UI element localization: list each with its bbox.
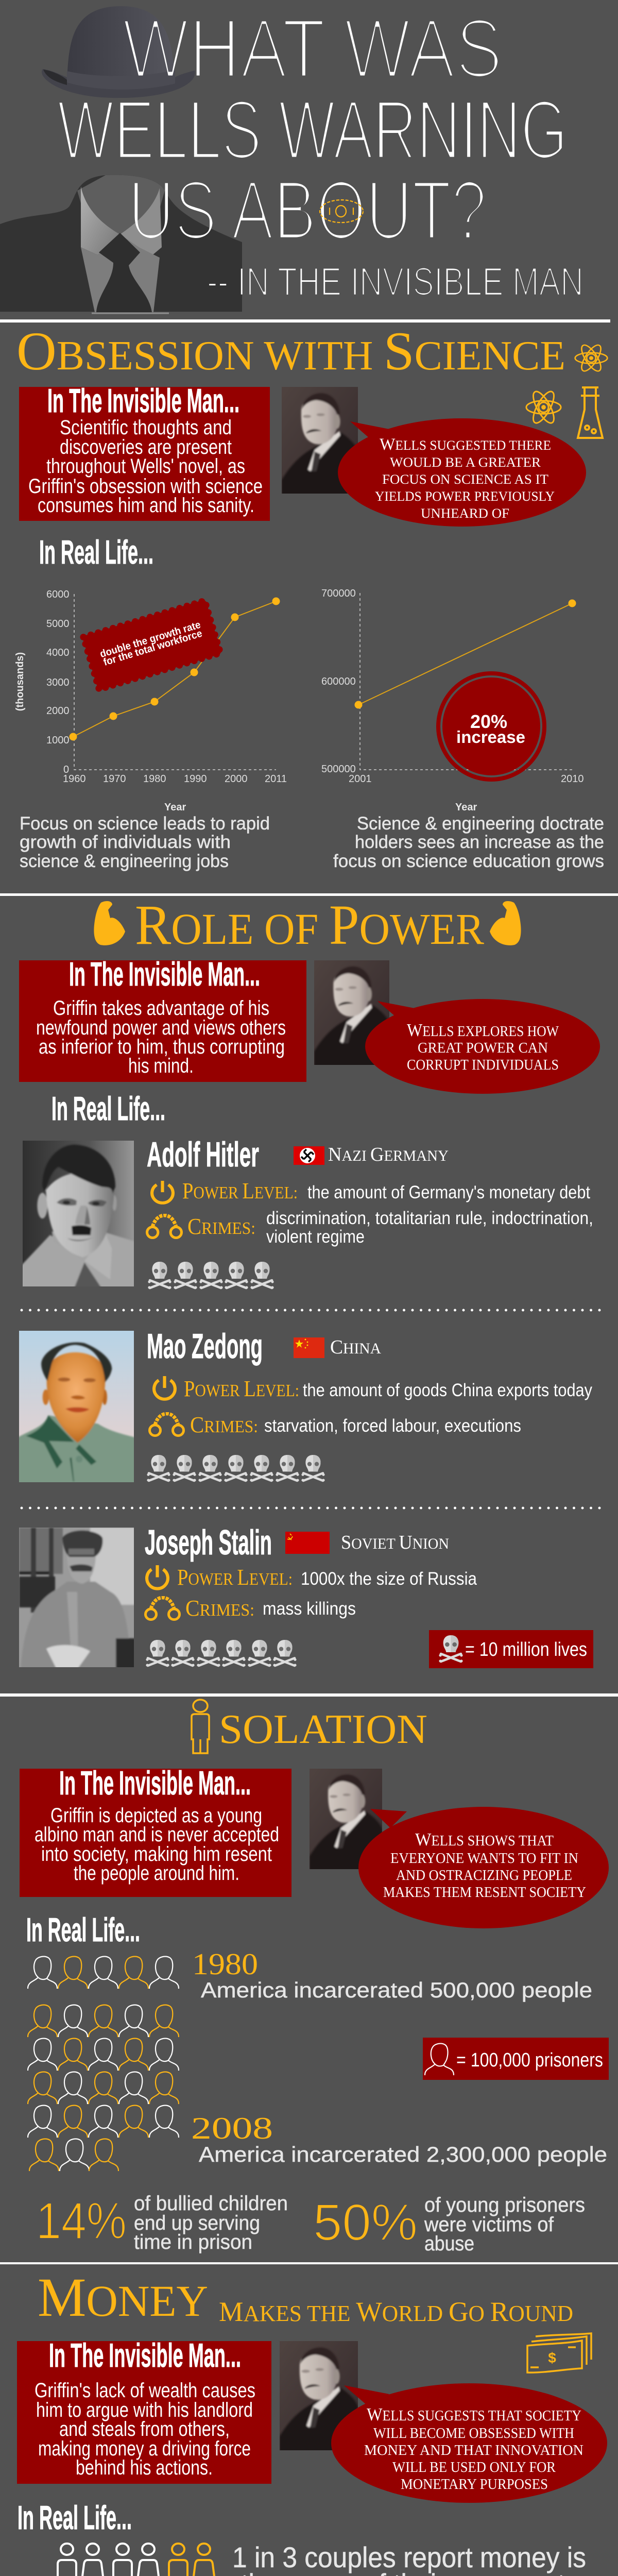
heading: in real life: In Real Life... [26,1911,140,1948]
section: role of power [18,893,600,1669]
title [57,1,568,257]
year: 1980: 1980 [192,1947,258,1981]
stat: 50 percent: abuse [424,2232,474,2255]
panel: in the invisible man: In The Invisible Man... [47,382,239,419]
callout: 20% increase: increase [456,727,525,747]
panel: in the invisible man: his mind. [128,1055,194,1077]
stat: 1 in 3 couples: 1 in 3 couples report money is [232,2541,586,2573]
panel: in the invisible man: the people around him. [74,1862,239,1885]
panel: in the invisible man: In The Invisible Man... [69,955,260,993]
divider [0,2262,618,2264]
caption: left chart: science & engineering jobs [20,851,229,871]
caption: right chart: focus on science education grows [333,851,604,871]
photo: H. G. Wells [314,960,389,1069]
label: Soviet Union: SOVIET UNION [341,1532,449,1553]
panel: in the invisible man: Scientific thoughts and [60,416,232,439]
heading: in real life: In Real Life... [39,533,153,571]
title: US ABOUT? [128,163,487,257]
icon: power [154,1376,175,1399]
skulls: Mao [147,1455,325,1482]
caption: right chart: holders sees an increase as the [355,832,604,852]
label: China: CHINA [330,1336,381,1358]
speech bubble: wells explores [365,999,600,1094]
panel: in the invisible man: consumes him and his sanity. [38,494,254,517]
speech bubble: wells suggested [338,418,586,527]
icon: flexed bicep left [94,901,125,945]
power level: POWER LEVEL: [177,1565,293,1590]
callout: 20% increase: 20% [470,711,507,732]
caption: left chart: growth of individuals with [20,832,231,852]
flag: Nazi Germany [294,1146,324,1165]
illustration: invisible man suit [0,175,242,313]
name: Adolf Hitler: Adolf Hitler [147,1135,259,1174]
power level [184,1376,592,1401]
line chart: science and engineering jobs: 1990 [184,773,207,785]
panel: in the invisible man: him to argue with his landlord [36,2399,253,2421]
speech bubble: wells shows: WELLS SHOWS THAT [415,1829,554,1850]
pictogram: 2008 prisoners [28,2005,179,2171]
speech bubble: wells suggested: FOCUS ON SCIENCE AS IT [382,472,548,487]
panel: in the invisible man: throughout Wells' novel, as [46,455,245,478]
speech bubble: wells suggests: WILL BECOME OBSESSED WITH [373,2426,574,2442]
power level [182,1178,590,1204]
line chart: science and engineering jobs: 0 [63,764,69,775]
speech bubble: wells suggested: YIELDS POWER PREVIOUSLY [375,489,555,504]
speech bubble: wells suggests: WILL BE USED ONLY FOR [392,2460,556,2476]
line chart: science and engineering jobs: 1000 [46,735,69,746]
power level: 1000x the size of Russia [301,1569,477,1589]
flag: Soviet Union [285,1532,330,1554]
icon: power [147,1565,168,1589]
speech bubble: wells shows [358,1807,609,1928]
label: Nazi Germany: NAZI GERMANY [328,1144,449,1165]
stat: 14 percent: of bullied children [134,2192,288,2215]
stat: 14 percent: time in prison [134,2231,252,2253]
speech bubble: wells explores: CORRUPT INDIVIDUALS [407,1057,559,1073]
caption: left chart [20,814,270,871]
line chart: doctorate holders: 2010 [561,773,584,785]
speech bubble: wells shows: AND OSTRACIZING PEOPLE [396,1868,572,1884]
icon: stack of money: $ [548,2350,556,2366]
speech bubble: wells suggests: MONEY AND THAT INNOVATION [364,2443,583,2459]
panel: in the invisible man: albino man and is never accepted [35,1823,279,1846]
panel: in the invisible man: In The Invisible Man... [59,1764,251,1802]
line chart: science and engineering jobs: 2011 [265,773,287,785]
caption: left chart: Focus on science leads to rapid [20,814,270,834]
stat: 500,000 people: America incarcerated 500,000 people [201,1978,592,2002]
line chart: science and engineering jobs: 1970 [103,773,126,785]
subheading: makes the world go round: MAKES THE WORLD GO ROUND [219,2296,573,2327]
stat: 50 percent: of young prisoners [424,2194,585,2216]
line chart: science and engineering jobs: 2000 [225,773,247,785]
line chart: science and engineering jobs: 5000 [46,618,69,630]
name: Joseph Stalin: Joseph Stalin [145,1523,272,1562]
crimes: violent regime [266,1227,365,1247]
crimes: discrimination, totalitarian rule, indoctrination, [266,1208,593,1228]
speech bubble: wells suggests: MONETARY PURPOSES [401,2477,548,2493]
callout: double the growth rate [83,601,220,689]
speech bubble: wells shows: EVERYONE WANTS TO FIT IN [390,1851,578,1867]
speech bubble: wells suggested: UNHEARD OF [421,506,509,521]
crimes: CRIMES: [187,1214,255,1239]
divider [0,319,610,323]
photo: Joseph Stalin [19,1528,134,1667]
icon: atom [526,388,561,426]
icon: handcuffs [147,1215,181,1238]
icon: eye in the O [320,200,363,223]
line chart: doctorate holders: Year [455,802,477,813]
icon: handcuffs [149,1414,183,1436]
line chart: science and engineering jobs: 3000 [46,677,69,688]
speech bubble: wells explores: GREAT POWER CAN [418,1040,548,1056]
crimes: mass killings [263,1599,356,1619]
panel: in the invisible man [20,1764,291,1897]
panel: in the invisible man: Griffin's obsession with science [28,475,263,498]
line chart: science and engineering jobs: (thousands) [14,652,26,711]
speech bubble: wells suggests [331,2383,607,2503]
legend: skull equals 10 million lives [429,1630,593,1668]
name: Mao Zedong: Mao Zedong [147,1327,263,1366]
section: obsession with science [14,321,607,871]
section: isolation [20,1700,609,2255]
line chart: doctorate holders: 600000 [321,676,356,687]
line chart: science and engineering jobs: Year [164,802,186,813]
heading: in real life: In Real Life... [52,1090,165,1127]
panel: in the invisible man: as inferior to him, thus corrupting [39,1036,285,1058]
power level: POWER LEVEL: [182,1178,298,1204]
crimes: CRIMES: [190,1412,258,1437]
legend: skull equals 10 million lives: = 10 million lives [465,1639,587,1660]
heading: obsession with science: OBSESSION WITH SCIENCE [16,321,565,381]
title: WHAT WAS [122,1,503,95]
photo: Mao Zedong [19,1331,134,1482]
stat: 50 percent [313,2194,585,2255]
panel: in the invisible man: and steals from others, [59,2418,230,2441]
callout: double the growth rate: for the total workforce [102,628,203,668]
heading: money: MONEY [38,2267,208,2328]
section: money [13,2267,607,2576]
callout: double the growth rate: double the growth rate [98,619,202,660]
speech bubble: wells shows: MAKES THEM RESENT SOCIETY [383,1885,586,1901]
power level [177,1565,477,1590]
icon: power [152,1181,173,1203]
line chart: science and engineering jobs: 1960 [63,773,85,785]
caption: right chart [333,814,604,871]
panel: in the invisible man [19,382,270,521]
year: 2008: 2008 [191,2111,273,2145]
crimes [185,1596,356,1621]
line chart: science and engineering jobs: 2000 [46,705,69,717]
panel: in the invisible man: making money a driving force [38,2437,251,2460]
photo: Adolf Hitler [23,1141,134,1286]
illustration: bowler hat [42,6,195,98]
heading: role of power: ROLE OF POWER [135,893,485,956]
legend: person equals 100,000 prisoners [423,2038,609,2080]
stat: 50 percent: 50% [313,2194,418,2251]
photo: H. G. Wells [280,2341,358,2454]
panel: in the invisible man: Griffin is depicted as a young [50,1804,262,1827]
line chart: science and engineering jobs: 6000 [46,589,69,600]
line chart: science and engineering jobs [14,589,287,813]
icon: atom beside heading [575,343,607,374]
crimes: starvation, forced labour, executions [264,1416,521,1436]
pictogram: 1980 prisoners [28,1957,179,1989]
panel: in the invisible man: into society, making him resent [41,1843,272,1866]
line chart: doctorate holders: 2001 [349,773,372,785]
photo: H. G. Wells [310,1769,382,1872]
speech bubble: wells suggested: WOULD BE A GREATER [390,455,541,470]
panel: in the invisible man: newfound power and views others [36,1016,286,1039]
panel: in the invisible man: Griffin takes advantage of his [53,997,269,1020]
skulls: Hitler [148,1262,274,1289]
callout: 20% increase [438,673,544,779]
speech bubble: wells suggested: WELLS SUGGESTED THERE [380,435,551,454]
icon: handcuffs [145,1598,179,1620]
line chart: science and engineering jobs: 4000 [46,647,69,658]
power level: POWER LEVEL: [184,1376,299,1401]
icon: flexed bicep right [490,901,521,945]
stat: 14 percent: 14% [36,2192,127,2250]
line chart: doctorate holders [321,588,584,813]
speech bubble: wells suggests: WELLS SUGGESTS THAT SOCIETY [367,2404,581,2425]
stat: 2,300,000 people: America incarcerated 2,300,000 people [199,2142,607,2166]
divider [0,1693,618,1697]
stat: 14 percent: end up serving [134,2212,260,2234]
line chart: doctorate holders: 700000 [321,588,356,599]
caption: right chart: Science & engineering doctrate [357,814,604,834]
line chart: doctorate holders: 500000 [321,764,356,775]
heading: isolation: SOLATION [219,1707,427,1752]
stat: 14 percent [36,2192,288,2253]
icon: stack of money [527,2333,591,2372]
icon: person as letter I [192,1700,209,1753]
pictogram: three couples [58,2544,216,2576]
skulls: Stalin [146,1640,297,1667]
flag: China [294,1337,324,1358]
crimes [190,1412,521,1437]
panel: in the invisible man [17,2336,271,2484]
crimes: CRIMES: [185,1596,254,1621]
stat: 50 percent: were victims of [424,2213,554,2236]
icon: flask [578,387,603,438]
panel: in the invisible man: behind his actions. [76,2456,213,2479]
line chart: science and engineering jobs: 1980 [143,773,166,785]
panel: in the invisible man: In The Invisible Man... [49,2336,241,2374]
crimes [187,1208,593,1247]
panel: in the invisible man: Griffin's lack of wealth causes [35,2379,255,2402]
photo: H. G. Wells [282,387,358,497]
divider [0,893,618,896]
heading: in real life: In Real Life... [18,2499,132,2536]
panel: in the invisible man: discoveries are present [60,436,232,459]
speech bubble: wells explores: WELLS EXPLORES HOW [407,1020,559,1040]
panel: in the invisible man [19,955,306,1082]
